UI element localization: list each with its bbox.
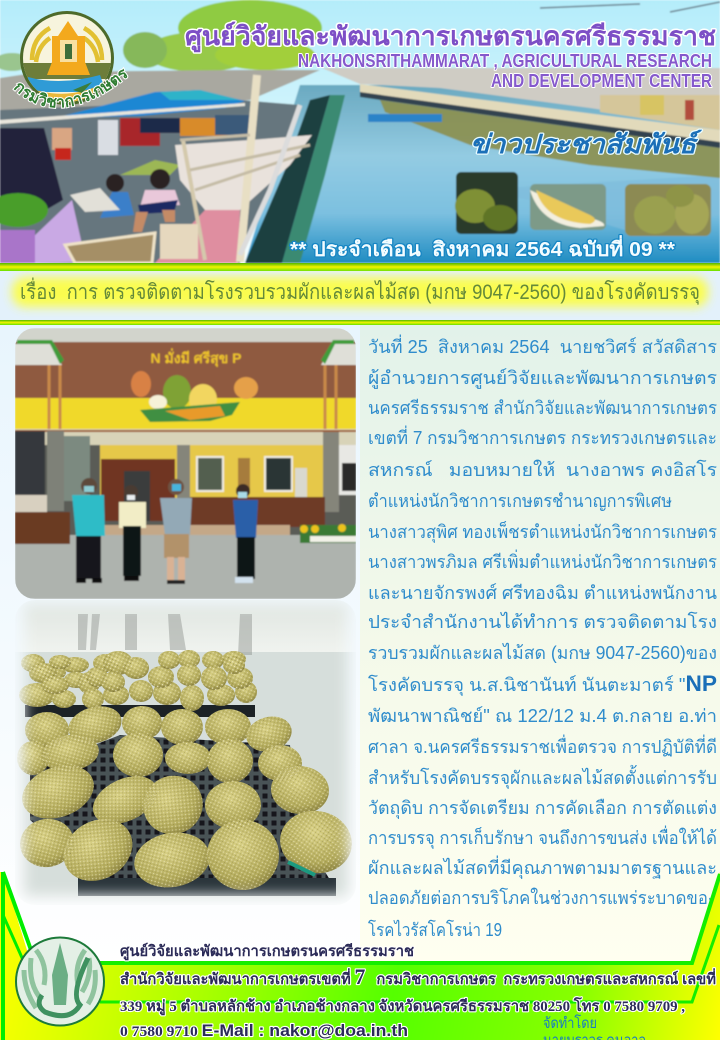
market roof bbox=[0, 68, 320, 111]
article body text: วันที่ 25 สิงหาคม 2564 นายชวิศร์ สวัสดิสาร bbox=[368, 334, 717, 357]
centre title: ศูนย์วิจัยและพัฒนาการเกษตรนครศรีธรรมราช bbox=[185, 21, 716, 53]
lower colour band bbox=[0, 320, 720, 325]
article body text bbox=[368, 334, 717, 940]
article body text: สหกรณ์ มอบหมายให้ นางอาพร คงอิสโร bbox=[368, 459, 717, 480]
chalkboard bbox=[0, 128, 64, 209]
article body text: สำหรับโรงคัดบรรจุผักและผลไม้สดตั้งแต่การรับ bbox=[368, 765, 717, 789]
durian photo inserts bbox=[455, 172, 711, 236]
article body text: และนายจักรพงศ์ ศรีทองฉิม ตำแหน่งพนักงาน bbox=[368, 583, 717, 603]
crest name: กรมวิชาการเกษตร bbox=[12, 66, 128, 109]
royal seal bbox=[16, 938, 104, 1026]
producer credit bbox=[543, 1014, 646, 1040]
person 3 bbox=[160, 479, 192, 584]
sign logo bbox=[131, 348, 258, 422]
wires bbox=[540, 2, 720, 12]
building interior bbox=[15, 445, 356, 535]
article body text: พัฒนาพาณิชย์" ณ 122/12 ม.4 ต.กลาย อ.ท่า bbox=[368, 706, 717, 726]
article body text: ผู้อำนวยการศูนย์วิจัยและพัฒนาการเกษตร bbox=[368, 368, 717, 389]
trays bbox=[25, 705, 255, 717]
article body text: โรงคัดบรรจุ น.ส.นิชานันท์ นันตะมาตร์ " NP bbox=[368, 671, 717, 696]
article body text: โรคไวรัสโคโรน่า 19 bbox=[368, 919, 502, 940]
blue awning bbox=[55, 90, 245, 118]
footer address: สำนักวิจัยและพัฒนาการเกษตรเขตที่ 7 กรมวิชาการเกษตร กระทรวงเกษตรและสหกรณ์ เลขที่ bbox=[120, 964, 716, 989]
wooden crate bbox=[65, 233, 155, 263]
article body text: ประจำสำนักงานได้ทำการ ตรวจติดตามโรง bbox=[368, 611, 717, 632]
person 2 bbox=[119, 485, 146, 581]
person 1 bbox=[72, 478, 105, 583]
header banner photo bbox=[0, 0, 720, 263]
article body text: รวบรวมผักและผลไม้สด (มกษ 9047-2560)ของ bbox=[368, 642, 717, 663]
left column background bbox=[0, 325, 360, 965]
issue line: ** ประจำเดือน สิงหาคม 2564 ฉบับที่ 09 ** bbox=[290, 234, 675, 261]
press release label: ข่าวประชาสัมพันธ์ bbox=[470, 129, 703, 159]
bench bbox=[15, 512, 70, 544]
heading strip background bbox=[0, 271, 720, 320]
person 4 bbox=[233, 484, 258, 583]
fern and lilac cloth bbox=[0, 193, 48, 227]
steps bbox=[100, 525, 290, 535]
distant market and bridge bbox=[322, 68, 720, 148]
pier posts and railings bbox=[240, 75, 257, 262]
article body text: วัตถุดิบ การจัดเตรียม การคัดเลือก การตัดแต่ง bbox=[368, 798, 717, 819]
photo: durians on trays bbox=[15, 600, 357, 905]
durian fruit bbox=[15, 650, 357, 893]
market ground bbox=[0, 100, 300, 263]
article body text: ตำแหน่งนักวิชาการเกษตรชำนาญการพิเศษ bbox=[368, 491, 672, 511]
footer address: 339 หมู่ 5 ตำบลหลักช้าง อำเภอช้างกลาง จังหวัดนครศรีธรรมราช 80250 โทร 0 7580 9709 , bbox=[120, 996, 685, 1016]
footer address: ศูนย์วิจัยและพัฒนาการเกษตรนครศรีธรรมราช bbox=[120, 942, 414, 961]
flower bed bbox=[300, 525, 356, 543]
department crest bbox=[12, 11, 128, 109]
producer credit: จัดทำโดย bbox=[543, 1014, 597, 1032]
photo: officials at packing house bbox=[15, 328, 356, 599]
lake water bbox=[245, 85, 720, 263]
white table bbox=[70, 188, 120, 212]
crowd bbox=[98, 120, 118, 155]
white boat hull bbox=[175, 135, 312, 210]
sign logo: N มั่งมี ศรีสุข P bbox=[151, 348, 241, 367]
produce bbox=[120, 160, 180, 175]
article body text: ผักและผลไม้สดที่มีคุณภาพตามมาตรฐานและ bbox=[368, 855, 717, 879]
children sitting bbox=[106, 174, 124, 192]
footer address bbox=[120, 942, 716, 1040]
right text panel background bbox=[360, 325, 720, 965]
footer address: 0 7580 9710 E-Mail : nakor@doa.in.th bbox=[120, 1021, 408, 1040]
tree canopy bbox=[0, 0, 322, 72]
reflected legs bbox=[78, 614, 252, 655]
top colour band bbox=[0, 263, 720, 271]
footer panel bbox=[0, 872, 720, 1040]
tag bbox=[288, 862, 315, 875]
